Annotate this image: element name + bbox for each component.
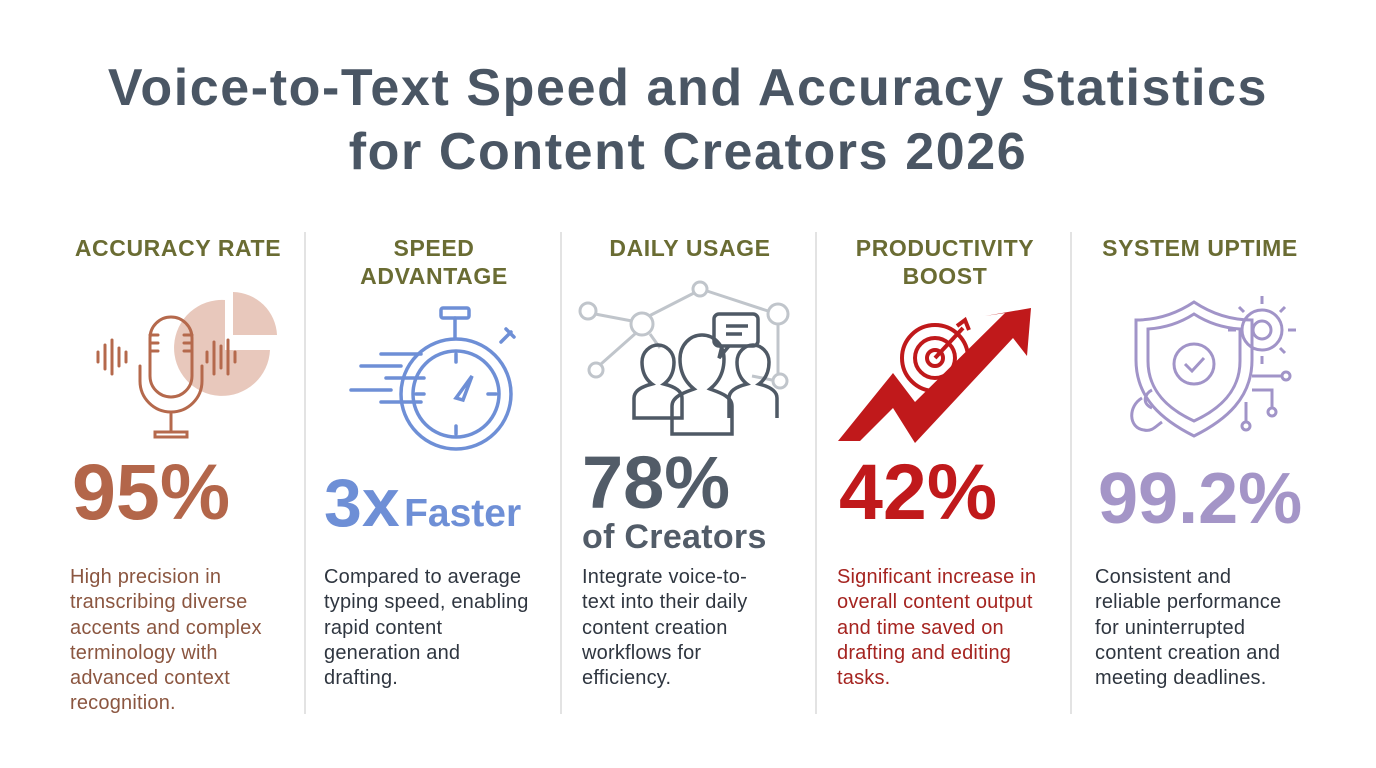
description: Consistent and reliable performance for uninterrupted content creation and meeting deadlines.: [1095, 566, 1281, 689]
stat: [582, 441, 767, 556]
heading: SPEED: [394, 235, 474, 261]
description: Significant increase in overall content output and time saved on drafting and editing tasks.: [837, 566, 1036, 689]
heading: ADVANTAGE: [360, 263, 508, 289]
panel: productivity boost: [837, 235, 1036, 689]
description: Compared to average typing speed, enabling rapid content generation and drafting.: [324, 566, 529, 689]
stat: 42%: [839, 447, 997, 536]
description: Integrate voice-to-text into their daily content creation workflows for efficiency.: [582, 566, 747, 689]
panel: speed advantage: [324, 235, 529, 689]
description: High precision in transcribing diverse accents and complex terminology with advanced context recognition.: [70, 566, 262, 714]
panel: accuracy rate: [70, 235, 281, 714]
heading: [360, 235, 508, 289]
heading: DAILY USAGE: [609, 235, 771, 261]
title: for Content Creators 2026: [349, 123, 1027, 181]
icon: people network: [578, 280, 790, 436]
heading: ACCURACY RATE: [75, 235, 281, 261]
heading: PRODUCTIVITY: [856, 235, 1034, 261]
icon: stopwatch: [349, 306, 516, 451]
icon: microphone: [96, 292, 277, 438]
heading: BOOST: [903, 263, 987, 289]
stat: 78%: [582, 441, 730, 524]
heading: SYSTEM UPTIME: [1102, 235, 1298, 261]
panel: daily usage: [578, 235, 790, 689]
stat: 99.2%: [1098, 459, 1302, 539]
icon: shield: [1130, 296, 1296, 438]
icon: target and arrow: [838, 308, 1031, 443]
heading: [856, 235, 1034, 289]
stat: 95%: [72, 447, 230, 536]
title: [108, 59, 1268, 181]
title: Voice-to-Text Speed and Accuracy Statistics: [108, 59, 1268, 117]
stat: of Creators: [582, 518, 767, 556]
panel: system uptime: [1095, 235, 1302, 689]
stat: 3x Faster: [324, 465, 521, 541]
